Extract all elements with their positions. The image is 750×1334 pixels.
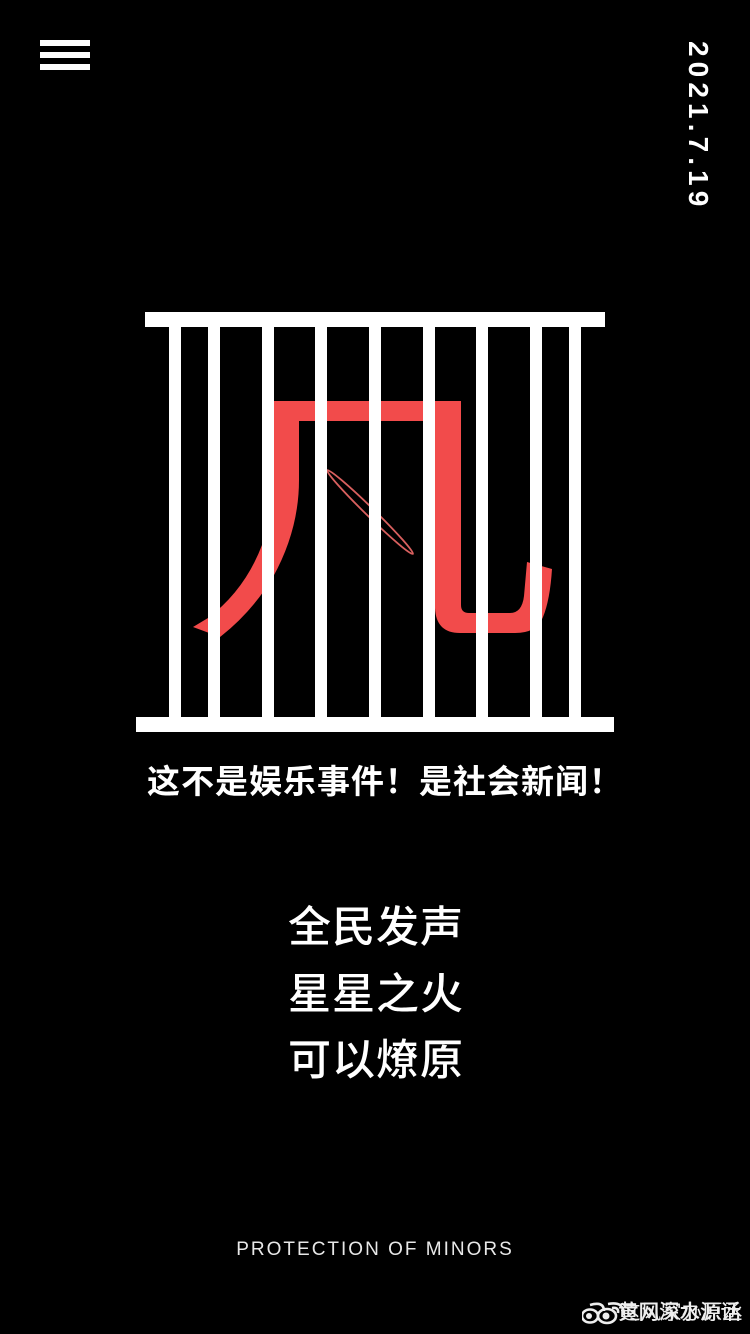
slogan line 1: 全民发声 xyxy=(288,904,464,952)
date: vertical text: 2021.7.19 xyxy=(683,41,714,211)
icon: hamburger menu xyxy=(40,40,90,70)
footer caption: PROTECTION OF MINORS xyxy=(236,1239,514,1260)
slogan text block xyxy=(288,904,464,1085)
illustration: red character behind prison bars xyxy=(136,312,614,732)
slogan line 2: 星星之火 xyxy=(288,971,464,1019)
red character stroke shape xyxy=(193,401,552,637)
thin outlined diagonal stroke xyxy=(324,467,416,557)
watermark text, second layer: 这风家办原丞 xyxy=(620,1301,743,1324)
icon: weibo logos xyxy=(582,1302,624,1324)
watermark: overlapping weibo logos and handles xyxy=(582,1301,743,1324)
watermark text, first layer: 黄网深水源话 xyxy=(618,1301,741,1324)
cage vertical bars xyxy=(169,327,581,717)
cage top bar xyxy=(145,312,605,327)
slogan line 3: 可以燎原 xyxy=(288,1037,464,1085)
subtitle: 这不是娱乐事件！是社会新闻！ xyxy=(147,763,623,800)
cage bottom bar xyxy=(136,717,614,732)
